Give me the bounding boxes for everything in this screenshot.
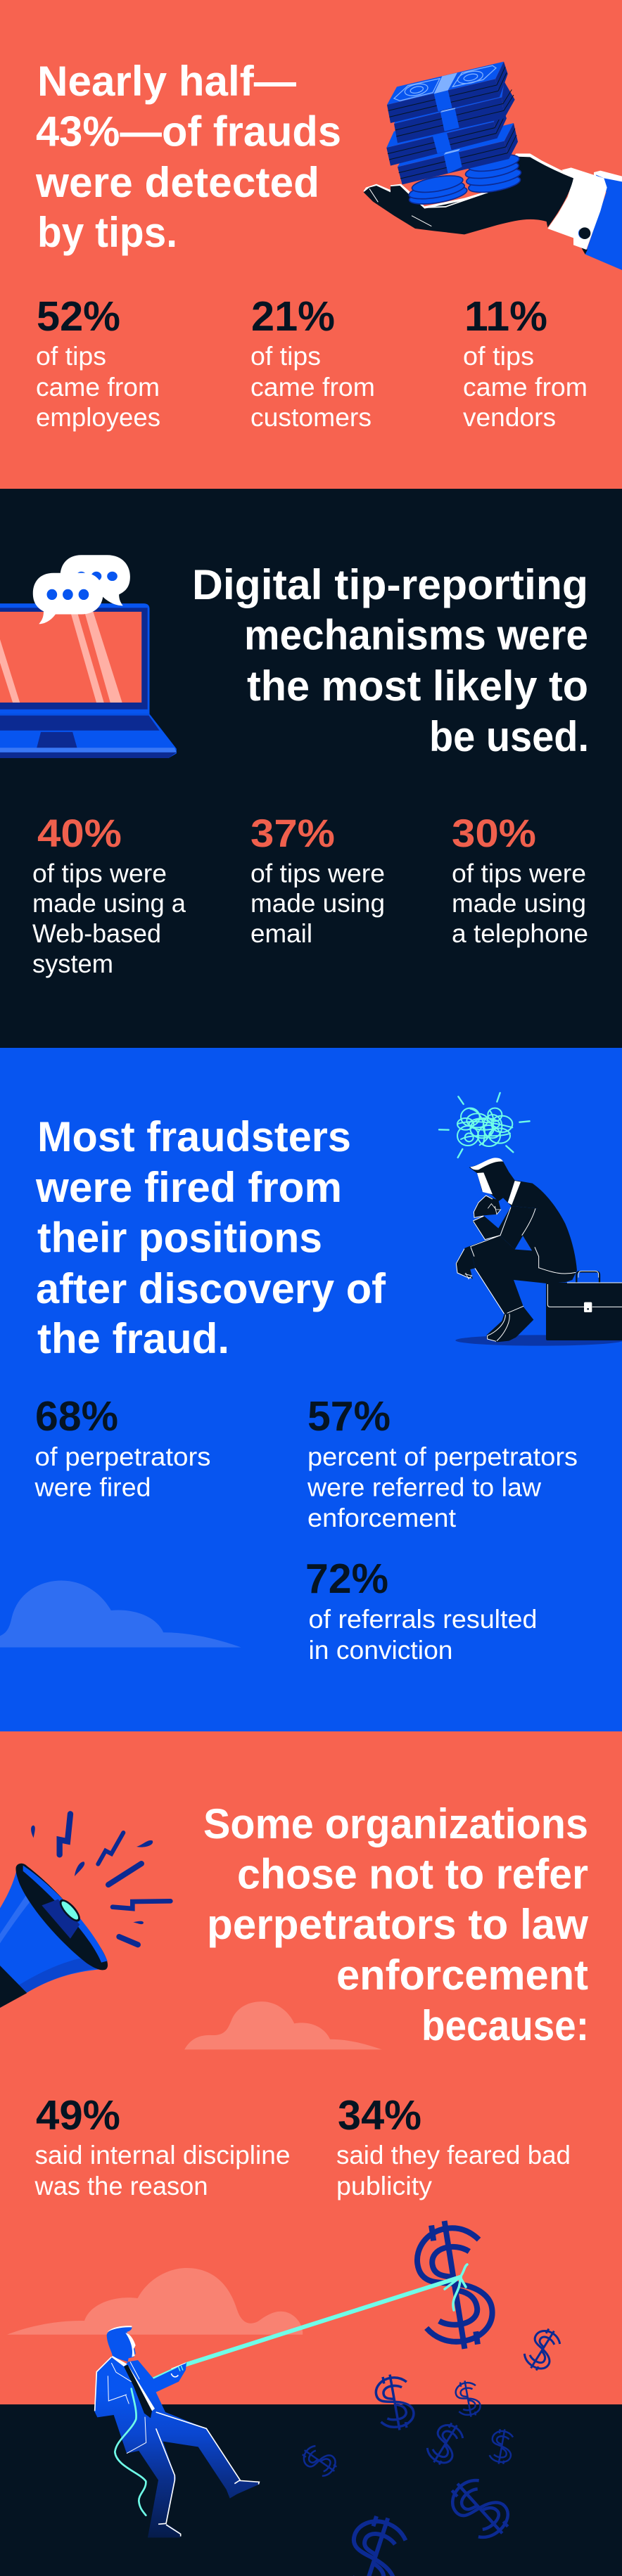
illustration: laptop with chat bubbles bbox=[0, 555, 177, 758]
stat: 40% web-based: system bbox=[32, 949, 113, 978]
heading: digital tip-reporting: Digital tip-reporting bbox=[192, 561, 588, 608]
heading: digital tip-reporting: the most likely to bbox=[247, 662, 588, 710]
stat: 72% conviction: of referrals resulted bbox=[308, 1605, 538, 1634]
stat: 52% employees: employees bbox=[36, 403, 160, 432]
stat: 37% email: 37% bbox=[250, 811, 335, 855]
heading: most fraudsters: after discovery of bbox=[36, 1265, 386, 1312]
heading: most fraudsters: their positions bbox=[37, 1214, 322, 1262]
briefcase bbox=[546, 1271, 622, 1340]
stat: 11% vendors bbox=[463, 293, 588, 432]
stat: 49% internal discipline bbox=[34, 2092, 290, 2200]
stat: 72% conviction bbox=[305, 1556, 538, 1665]
illustration: hand holding money bbox=[364, 62, 622, 270]
sound marks bbox=[60, 1814, 170, 1944]
stat: 37% email: of tips were bbox=[250, 859, 385, 887]
stat: 68% fired: of perpetrators bbox=[35, 1442, 211, 1471]
stat: 40% web-based: made using a bbox=[32, 889, 186, 918]
stat: 68% fired bbox=[34, 1393, 211, 1502]
stat: 34% bad publicity: 34% bbox=[338, 2092, 421, 2139]
heading: some organizations: enforcement bbox=[336, 1952, 588, 1999]
stat: 34% bad publicity bbox=[336, 2092, 571, 2200]
stat: 57% referred: were referred to law bbox=[307, 1473, 541, 1502]
stat: 21% customers: came from bbox=[250, 373, 375, 402]
panel: digital reporting bbox=[0, 489, 622, 1048]
cloud bbox=[184, 2001, 382, 2049]
stat: 11% vendors: vendors bbox=[463, 403, 556, 432]
man silhouette bbox=[456, 1158, 577, 1342]
icon: front chat bubble bbox=[33, 573, 103, 624]
title: nearly half: Nearly half— bbox=[37, 58, 296, 105]
title: nearly half: were detected bbox=[35, 159, 319, 206]
stat: 21% customers: of tips bbox=[250, 342, 321, 371]
heading: some organizations: perpetrators to law bbox=[207, 1901, 588, 1948]
stat: 57% referred: percent of perpetrators bbox=[307, 1442, 578, 1471]
stat: 11% vendors: of tips bbox=[463, 342, 534, 371]
rope tied to dollar sign bbox=[137, 2264, 467, 2387]
stat: 30% telephone: of tips were bbox=[452, 859, 586, 887]
stat: 52% employees bbox=[36, 293, 160, 432]
title: nearly half: 43%—of frauds bbox=[36, 108, 341, 155]
stat: 40% web-based: 40% bbox=[37, 811, 122, 855]
stat: 37% email bbox=[250, 811, 385, 948]
title: nearly half: by tips. bbox=[37, 209, 177, 256]
heading: some organizations: chose not to refer bbox=[237, 1851, 588, 1897]
stat: 30% telephone: 30% bbox=[452, 811, 536, 855]
panel: not referring to law enforcement bbox=[0, 1731, 622, 2405]
stat: 52% employees: came from bbox=[36, 373, 160, 402]
heading: some organizations: because: bbox=[421, 2002, 589, 2049]
stat: 57% referred: 57% bbox=[307, 1393, 391, 1440]
illustration: worried man on briefcase bbox=[439, 1093, 622, 1346]
icons: dollar signs bbox=[298, 2216, 565, 2576]
panel: tips detected frauds bbox=[0, 0, 622, 489]
heading: most fraudsters: were fired from bbox=[35, 1164, 342, 1211]
stat: 49% internal discipline: was the reason bbox=[34, 2172, 208, 2200]
stat: 40% web-based: of tips were bbox=[32, 859, 167, 887]
heading: some organizations: Some organizations bbox=[203, 1800, 588, 1847]
title: nearly half bbox=[35, 58, 341, 256]
stat: 57% referred bbox=[307, 1393, 578, 1532]
heading: digital tip-reporting bbox=[192, 561, 589, 760]
panel: fraudsters fired bbox=[0, 1048, 622, 1731]
heading: some organizations bbox=[203, 1800, 589, 2049]
cloud bbox=[0, 1581, 241, 1647]
stat: 40% web-based: Web-based bbox=[32, 919, 161, 948]
stat: 49% internal discipline: said internal discipline bbox=[35, 2141, 290, 2170]
stat: 72% conviction: 72% bbox=[305, 1556, 388, 1602]
illustration: businessman pulling rope bbox=[94, 2326, 259, 2537]
stat: 34% bad publicity: said they feared bad bbox=[336, 2141, 571, 2170]
panel: ground bbox=[0, 2404, 622, 2576]
heading: digital tip-reporting: be used. bbox=[429, 713, 589, 760]
stat: 21% customers: customers bbox=[250, 403, 372, 432]
stat: 52% employees: of tips bbox=[36, 342, 106, 371]
stat: 11% vendors: came from bbox=[463, 373, 588, 402]
illustration: megaphone bbox=[0, 1814, 170, 2008]
heading: digital tip-reporting: mechanisms were bbox=[244, 612, 588, 658]
icon: tangled thoughts bbox=[439, 1093, 530, 1158]
stat: 68% fired: were fired bbox=[34, 1473, 151, 1502]
stat: 21% customers bbox=[250, 293, 375, 432]
stat: 11% vendors: 11% bbox=[464, 293, 547, 340]
stat: 40% web-based bbox=[32, 811, 186, 978]
stat: 30% telephone: made using bbox=[452, 889, 586, 918]
heading: most fraudsters: the fraud. bbox=[37, 1315, 229, 1362]
heading: most fraudsters bbox=[35, 1113, 386, 1362]
stat: 37% email: made using bbox=[250, 889, 385, 918]
stat: 30% telephone: a telephone bbox=[452, 919, 588, 948]
stat: 57% referred: enforcement bbox=[307, 1504, 457, 1532]
stat: 21% customers: 21% bbox=[251, 293, 335, 340]
cloud bbox=[7, 2268, 303, 2335]
stat: 34% bad publicity: publicity bbox=[336, 2172, 432, 2200]
stat: 30% telephone bbox=[452, 811, 588, 948]
icon: back chat bubble bbox=[61, 555, 130, 605]
stat: 37% email: email bbox=[250, 919, 312, 948]
stat: 68% fired: 68% bbox=[35, 1393, 118, 1440]
heading: most fraudsters: Most fraudsters bbox=[37, 1113, 351, 1160]
stat: 49% internal discipline: 49% bbox=[36, 2092, 120, 2139]
stat: 72% conviction: in conviction bbox=[308, 1636, 453, 1665]
stat: 52% employees: 52% bbox=[37, 293, 120, 340]
